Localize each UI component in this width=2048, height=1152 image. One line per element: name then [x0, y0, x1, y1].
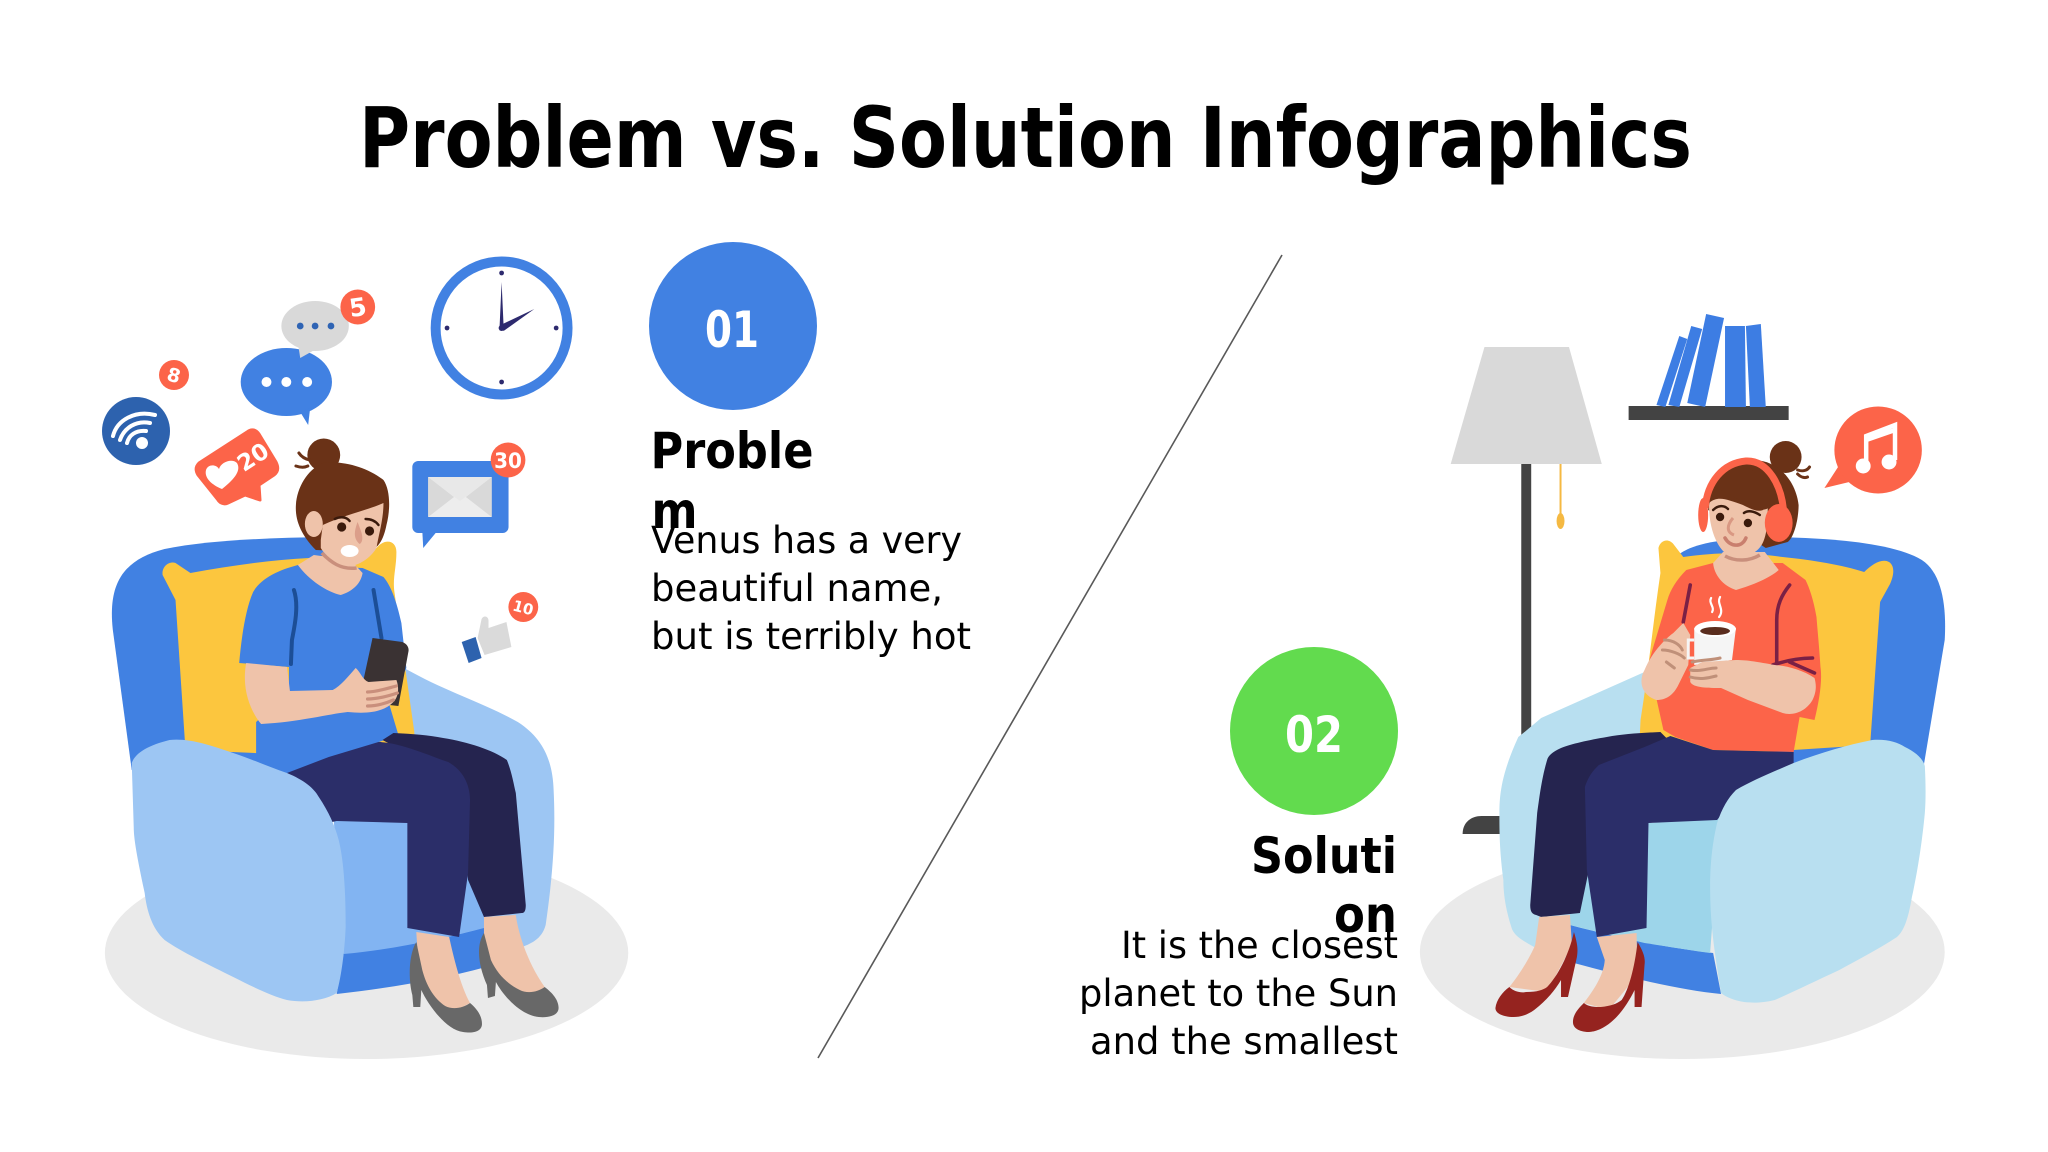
chair near arm left — [132, 740, 346, 1001]
icon: heart like bubble — [196, 430, 278, 504]
heading: Solution — [1251, 827, 1397, 944]
text block: solution description: It is the closest — [1121, 924, 1398, 967]
phone — [363, 638, 409, 706]
heading: Problem: m — [652, 482, 698, 540]
diagonal divider line — [818, 255, 1282, 1058]
icon: thumbs up: 10 — [511, 597, 535, 619]
shirt — [1648, 563, 1821, 752]
head with headphones — [1698, 441, 1810, 560]
icon: wifi — [102, 397, 170, 465]
badge: 8 — [159, 360, 189, 390]
finger stripes — [1662, 640, 1720, 679]
shirt seams — [1683, 585, 1814, 673]
panel: problem illustration — [105, 438, 628, 1059]
text block: solution description: and the smallest — [1090, 1020, 1398, 1063]
finger stripes — [368, 686, 397, 706]
heading: Solution: Soluti — [1251, 827, 1397, 885]
figure right: woman with coffee — [1495, 441, 1821, 1032]
floor lamp — [1451, 347, 1602, 834]
badge: 5 — [340, 290, 375, 324]
shirt seams — [291, 590, 296, 664]
chair near arm right — [1710, 740, 1926, 1003]
step 02 number circle — [1230, 647, 1398, 815]
far shoe — [479, 933, 559, 1017]
far leg — [1530, 732, 1688, 917]
heading: Problem: Proble — [650, 422, 814, 480]
far shoe — [1495, 932, 1577, 1017]
shirt — [239, 565, 406, 775]
text block: problem description — [651, 519, 971, 658]
step 01 number circle: 01 — [705, 301, 759, 359]
coffee cup — [1688, 597, 1736, 665]
icon: clock — [436, 262, 568, 394]
far foot — [484, 915, 545, 998]
left hand — [1641, 623, 1690, 700]
near foot — [416, 932, 470, 1012]
text block: solution description — [1079, 924, 1398, 1063]
far leg — [382, 733, 526, 917]
figure left: woman with phone — [239, 438, 559, 1033]
head — [296, 438, 389, 568]
icon: mail bubble: 30 — [494, 449, 522, 473]
panel: solution illustration — [1420, 314, 1945, 1059]
armchair left — [112, 537, 554, 994]
near foot — [1584, 933, 1638, 1010]
far foot — [1509, 915, 1572, 992]
badge: 8: 8 — [165, 364, 183, 388]
step 01 number circle — [649, 242, 817, 410]
near shoe — [1573, 942, 1645, 1032]
near leg — [287, 742, 470, 937]
icon: music bubble — [1824, 406, 1922, 494]
armchair right — [1499, 537, 1945, 994]
floor shadow right — [1420, 845, 1945, 1059]
near leg — [1585, 736, 1794, 937]
step 02 number circle: 02 — [1285, 706, 1343, 764]
arm and hand — [245, 663, 398, 724]
icon: heart like bubble: 20 — [233, 438, 274, 477]
text block: problem description: beautiful name, — [651, 567, 943, 610]
heading: Problem — [650, 422, 814, 540]
heading: Solution: on — [1334, 886, 1397, 944]
text block: problem description: Venus has a very — [651, 519, 962, 562]
near shoe — [410, 942, 482, 1033]
text block: solution description: planet to the Sun — [1079, 972, 1398, 1015]
text block: problem description: but is terribly hot — [651, 615, 971, 658]
icon: grey chat bubble — [281, 301, 349, 358]
icon: mail bubble — [412, 442, 525, 548]
title: Problem vs. Solution Infographics — [359, 89, 1692, 187]
icon: blue chat bubble — [241, 348, 332, 425]
arm and right hand — [1690, 660, 1816, 714]
floor shadow left — [105, 847, 628, 1059]
badge: 5: 5 — [347, 292, 368, 323]
icon: thumbs up — [462, 592, 538, 663]
icon: bookshelf — [1629, 314, 1789, 420]
neckline skin — [1713, 552, 1779, 590]
neckline skin — [298, 555, 363, 595]
